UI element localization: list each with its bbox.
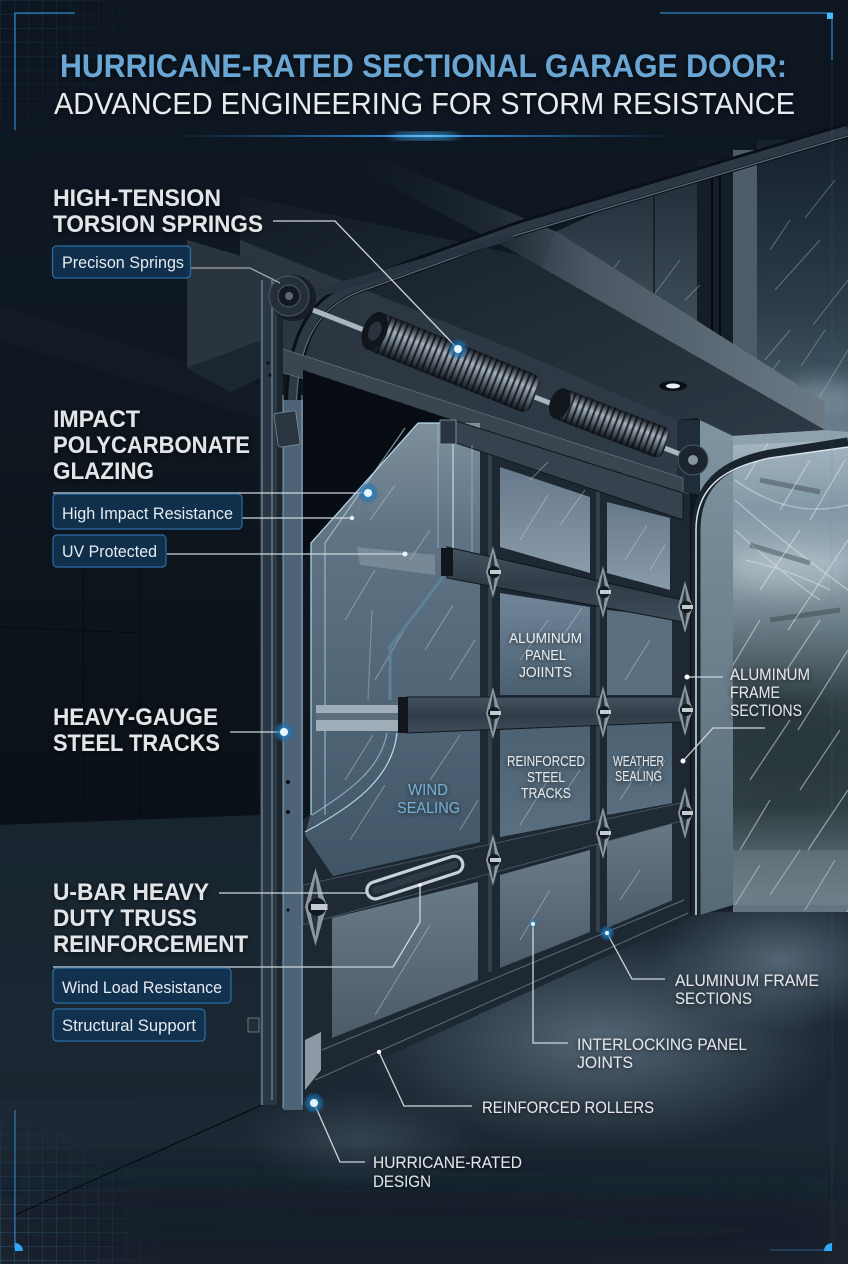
door label: aluminum panel joiints: ALUMINUM — [509, 631, 582, 647]
heading: u-bar heavy duty truss reinforcement: U-BAR HEAVY — [53, 879, 209, 906]
door label: aluminum panel joiints: PANEL — [525, 648, 566, 664]
cutaway polycarbonate glazing — [305, 423, 480, 876]
door label: wind sealing: WIND — [408, 782, 448, 799]
second torsion spring — [545, 385, 672, 460]
label: aluminum frame sections (bottom) — [675, 972, 819, 1008]
tag: high impact resistance — [53, 494, 242, 529]
pulley left — [269, 275, 316, 321]
heading: high-tension torsion springs: TORSION SPRINGS — [53, 211, 263, 238]
rail between rows 1 and 2 — [447, 547, 683, 622]
door label: weather sealing: SEALING — [615, 769, 662, 785]
title — [54, 48, 795, 121]
recessed ceiling light — [659, 381, 687, 391]
concrete pillar — [700, 420, 733, 915]
panel end bracket — [440, 420, 456, 444]
scene: overhead torsion track — [292, 130, 848, 420]
rail between rows 2 and 3 — [407, 697, 683, 733]
label: aluminum frame sections (right): SECTIONS — [730, 702, 802, 720]
right arch track — [696, 442, 848, 915]
title divider — [170, 133, 680, 139]
label: aluminum frame sections (bottom): ALUMINUM FRAME — [675, 972, 819, 990]
scene: dark opening behind cutaway — [303, 370, 453, 560]
label: aluminum frame sections (right) — [730, 666, 810, 720]
scene: concrete slab overhang and wall block — [187, 150, 848, 520]
heading: u-bar heavy duty truss reinforcement — [53, 879, 248, 958]
door label: wind sealing: SEALING — [397, 800, 460, 817]
door label: weather sealing: WEATHER — [613, 754, 664, 770]
bottom corner plate — [305, 1032, 321, 1090]
label: hurricane-rated design: DESIGN — [373, 1173, 431, 1191]
rail between rows 3 and 4 — [303, 802, 685, 925]
sectional door frame — [303, 420, 693, 1095]
heading: heavy-gauge steel tracks: STEEL TRACKS — [53, 730, 220, 757]
tag: precison springs — [52, 246, 190, 278]
glass row 3 — [500, 720, 673, 837]
heading: impact polycarbonate glazing: GLAZING — [53, 458, 154, 485]
glazing edge outlines — [305, 423, 472, 832]
label: hurricane-rated design: HURRICANE-RATED — [373, 1154, 522, 1172]
label: interlocking panel joints: JOINTS — [577, 1054, 633, 1072]
scene: door header beam — [280, 348, 683, 508]
label: interlocking panel joints: INTERLOCKING PANEL — [577, 1036, 747, 1054]
title: ADVANCED ENGINEERING FOR STORM RESISTANCE — [54, 86, 795, 121]
tag: wind load resistance — [53, 968, 231, 1003]
heading: heavy-gauge steel tracks — [53, 704, 220, 757]
tag: precison springs: Precison Springs — [62, 253, 184, 272]
door label: reinforced steel tracks — [507, 754, 585, 802]
leader lines — [53, 221, 765, 1162]
title: HURRICANE-RATED SECTIONAL GARAGE DOOR: — [60, 48, 787, 84]
rain streaks on glass — [345, 462, 665, 1015]
heading: high-tension torsion springs — [53, 185, 263, 238]
tag: structural support: Structural Support — [62, 1016, 196, 1035]
door label: aluminum panel joiints — [509, 631, 582, 681]
left vertical steel track — [248, 280, 303, 1110]
main torsion spring — [356, 308, 543, 414]
scene: concrete floor — [0, 890, 848, 1264]
glass row 1 — [500, 467, 670, 590]
scene: upper wall, windows and stormy sky — [530, 140, 848, 450]
heading: impact polycarbonate glazing — [53, 406, 250, 485]
door label: aluminum panel joiints: JOIINTS — [519, 665, 572, 681]
heading: high-tension torsion springs: HIGH-TENSION — [53, 185, 221, 212]
door label: reinforced steel tracks: REINFORCED — [507, 754, 585, 770]
tag: structural support — [53, 1009, 205, 1041]
heading: u-bar heavy duty truss reinforcement: REINFORCEMENT — [53, 931, 248, 958]
bottom section trim lines — [315, 900, 688, 1080]
silver extrusion bar — [316, 705, 408, 731]
U-bar truss handle — [365, 854, 465, 901]
door label: reinforced steel tracks: TRACKS — [521, 786, 571, 802]
glass row 2 — [500, 593, 672, 695]
door label: reinforced steel tracks: STEEL — [527, 770, 565, 786]
hinges — [305, 546, 693, 946]
pulley right — [678, 445, 708, 475]
torsion shaft — [313, 310, 700, 462]
label: reinforced rollers: REINFORCED ROLLERS — [482, 1099, 654, 1117]
door label: wind sealing — [397, 782, 460, 817]
heading: u-bar heavy duty truss reinforcement: DUTY TRUSS — [53, 905, 197, 932]
heading: heavy-gauge steel tracks: HEAVY-GAUGE — [53, 704, 218, 731]
tag: wind load resistance: Wind Load Resistance — [62, 978, 222, 997]
top rail — [453, 420, 683, 520]
scene: left garage interior — [0, 300, 262, 1264]
tag: high impact resistance: High Impact Resistance — [62, 504, 233, 523]
heading: impact polycarbonate glazing: POLYCARBONATE — [53, 432, 250, 459]
glass row 4 — [332, 818, 673, 1038]
label: aluminum frame sections (right): FRAME — [730, 684, 780, 702]
door label: weather sealing — [613, 754, 664, 785]
scene: right exterior storm view — [710, 432, 848, 960]
mullions — [480, 445, 690, 985]
ghost extrusion bar — [357, 547, 435, 575]
label: aluminum frame sections (right): ALUMINUM — [730, 666, 810, 684]
callout markers — [273, 338, 690, 1114]
heading: impact polycarbonate glazing: IMPACT — [53, 406, 140, 433]
label: interlocking panel joints — [577, 1036, 747, 1072]
label: hurricane-rated design — [373, 1154, 522, 1191]
label: aluminum frame sections (bottom): SECTIONS — [675, 990, 752, 1008]
tag: uv protected: UV Protected — [62, 542, 157, 561]
tag: uv protected — [53, 535, 166, 567]
